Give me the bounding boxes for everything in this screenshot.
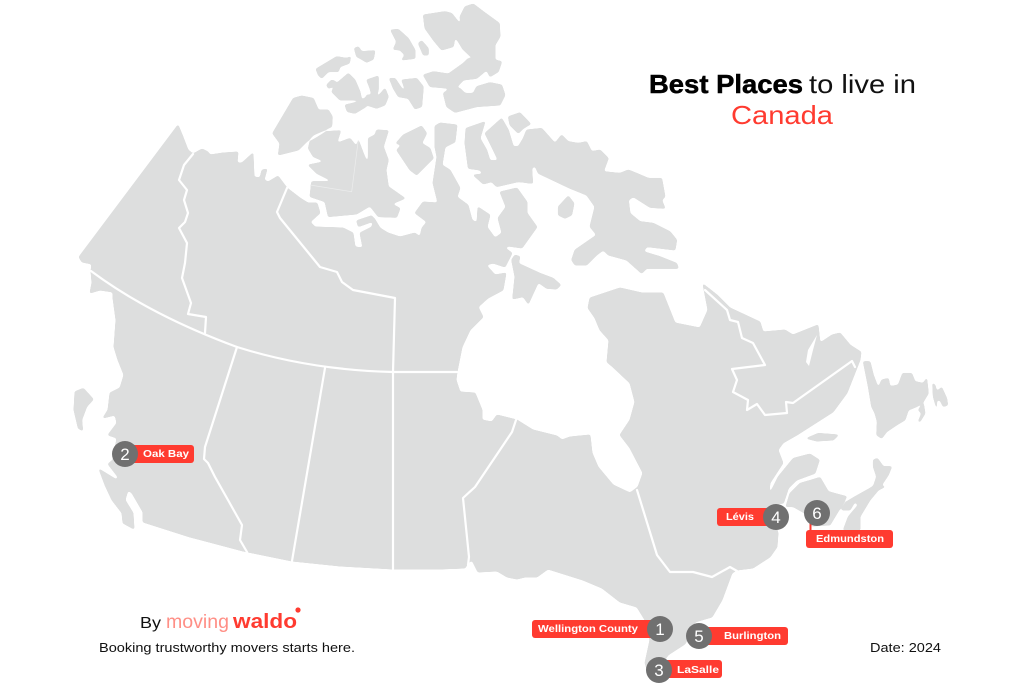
marker 6: Edmundston: Edmundston xyxy=(816,533,884,545)
tagline: Booking trustworthy movers starts here. xyxy=(99,640,355,655)
marker 3: LaSalle: LaSalle xyxy=(677,664,719,676)
provincial borders xyxy=(91,49,855,577)
marker 5: Burlington xyxy=(686,623,788,649)
Maritime peninsulas xyxy=(767,454,847,526)
marker 1: Wellington County: Wellington County xyxy=(538,623,638,635)
marker 6: Edmundston xyxy=(804,500,893,548)
marker 6: Edmundston: 6 xyxy=(812,504,822,523)
marker 4: Lévis xyxy=(717,504,789,530)
arctic islands west xyxy=(273,4,505,227)
Baffin and Hudson Bay islands xyxy=(465,113,678,304)
marker 3: LaSalle: 3 xyxy=(654,661,664,680)
Victoria Island xyxy=(308,130,405,217)
marker 2: Oak Bay: 2 xyxy=(120,445,130,464)
title: to live in xyxy=(809,69,916,99)
marker 4: Lévis: 4 xyxy=(771,508,781,527)
title xyxy=(649,69,916,130)
marker 4: Lévis: Lévis xyxy=(726,511,754,523)
brand logo: By moving waldo: waldo xyxy=(232,611,297,633)
marker 1: Wellington County xyxy=(532,616,673,642)
marker 1: Wellington County: 1 xyxy=(655,620,665,639)
Haida Gwaii xyxy=(74,388,93,431)
Atlantic islands xyxy=(807,362,948,530)
mainland xyxy=(79,123,861,672)
title: Canada xyxy=(731,100,834,130)
brand logo: By moving waldo xyxy=(140,607,301,633)
date: Date: 2024 xyxy=(870,640,941,655)
marker 5: Burlington: 5 xyxy=(694,627,704,646)
brand logo: By moving waldo: By xyxy=(140,615,161,632)
marker 5: Burlington: Burlington xyxy=(724,630,781,642)
brand logo: By moving waldo: moving xyxy=(166,612,229,633)
marker 2: Oak Bay: Oak Bay xyxy=(143,448,189,460)
title: Best Places xyxy=(649,69,803,99)
marker 2: Oak Bay xyxy=(112,441,194,467)
marker 3: LaSalle xyxy=(646,657,722,683)
